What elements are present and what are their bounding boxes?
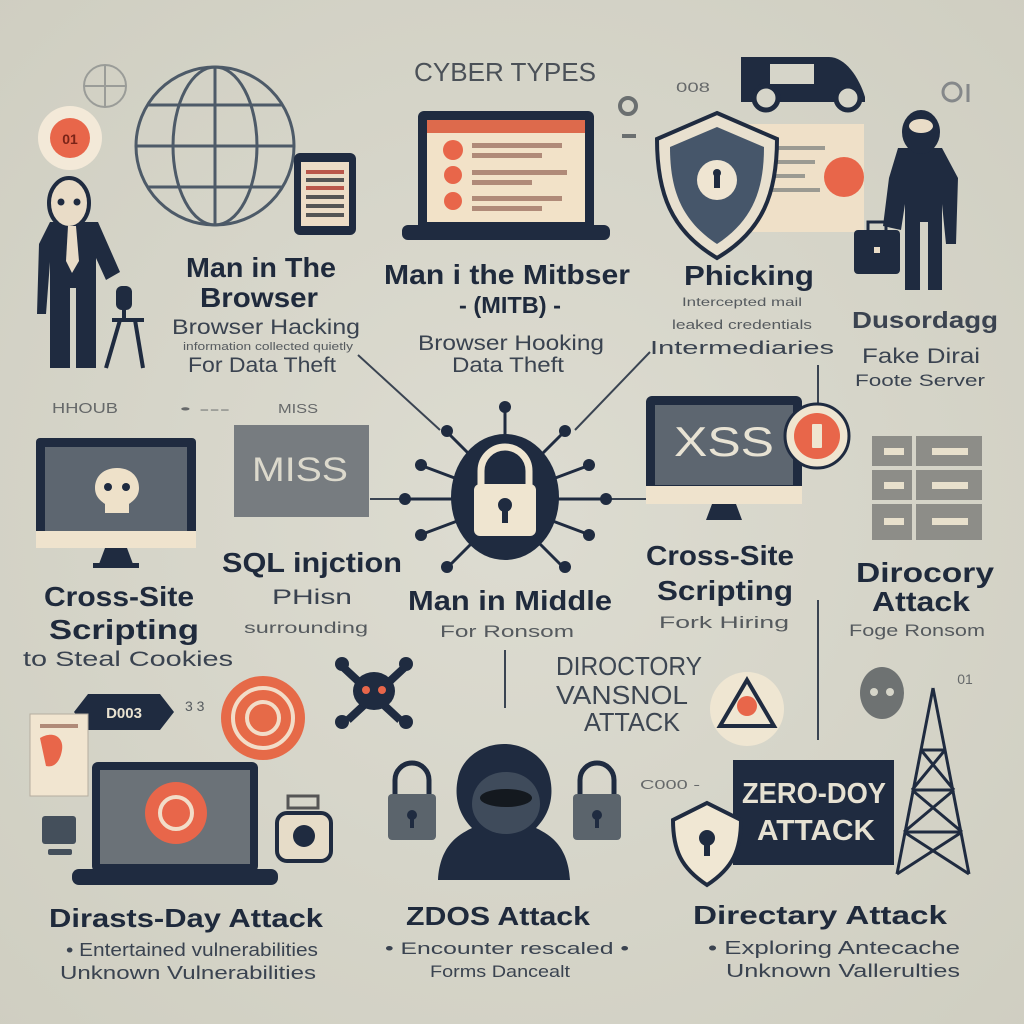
callout: D003 tag: [74, 694, 174, 730]
text block: directory attack right: Attack: [872, 586, 970, 617]
icon: document with note: [30, 714, 88, 796]
text block: dumpster: Foote Server: [855, 371, 985, 390]
text block: directory vansnol attack: VANSNOL: [556, 680, 688, 710]
text block: cross-site scripting right: Fork Hiring: [659, 613, 789, 632]
title: CYBER TYPES: [414, 57, 596, 87]
icon: padlock right: [573, 763, 621, 840]
small numbers near tag: 3 3: [185, 698, 205, 714]
icon: monitor XSS: [646, 396, 802, 520]
small text mid right: C000 -: [640, 777, 700, 792]
text block: zdos attack: • Encounter rescaled •: [385, 939, 629, 958]
icon: small lock device: [277, 796, 331, 861]
icon: small devices left of laptop: [42, 816, 76, 855]
icon: monitor with skull: [36, 438, 196, 568]
icon: laptop with spiral: [72, 762, 278, 885]
panel: MSS card: MISS: [252, 451, 348, 489]
text block: directory attack right: [849, 557, 994, 640]
small text row left: HHOUB: [52, 400, 118, 417]
small label top right of tower: 01: [957, 671, 973, 687]
text block: disaster-day attack: Dirasts-Day Attack: [49, 903, 324, 933]
icon: man in suit with stool: [37, 178, 144, 368]
text block: phishing: Intercepted mail: [682, 295, 802, 309]
panel: zero-day attack banner: ZERO-DOY: [742, 778, 886, 810]
text block: dumpster: [852, 307, 998, 390]
text block: directory attack bottom: Unknown Vallerulties: [726, 961, 960, 981]
small label top centre right: 008: [676, 79, 710, 95]
text block: cross-site scripting left: to Steal Cookies: [23, 648, 233, 671]
text block: directory attack right: Dirocory: [856, 557, 994, 588]
icon: tablet with report: [294, 153, 356, 235]
panel: zero-day attack banner: ATTACK: [757, 815, 875, 847]
icon: skull and crossbones: [335, 657, 413, 729]
icon: large globe: [136, 67, 294, 225]
icon: padlock left: [388, 763, 436, 840]
text block: man in the mitb: - (MITB) -: [459, 292, 561, 318]
icon: shield with lock: [657, 113, 777, 258]
text block: dumpster: Fake Dirai: [862, 345, 980, 368]
text block: disaster-day attack: • Entertained vulnerabilities: [66, 940, 318, 960]
text block: cross-site scripting right: [646, 540, 794, 632]
panel: phishing document: [700, 124, 864, 232]
text block: directory attack bottom: [693, 900, 960, 981]
icon: monitor XSS: XSS: [674, 418, 774, 465]
text block: directory attack right: Foge Ronsom: [849, 621, 985, 640]
icon: shield with keyhole: [673, 803, 741, 885]
panel: zero-day attack banner: [733, 760, 894, 865]
text block: sql injection: SQL injction: [222, 547, 402, 578]
icon: small marks beside laptop: [620, 98, 636, 136]
text block: directory attack bottom: • Exploring Antecache: [708, 938, 960, 958]
text block: sql injection: surrounding: [244, 620, 368, 637]
small text row left: MISS: [278, 401, 318, 416]
callout: D003 tag: D003: [106, 705, 142, 722]
icon: small marks top right: [943, 83, 968, 102]
text block: man in the mitb: Browser Hooking: [418, 332, 604, 355]
text block: cross-site scripting right: Cross-Site: [646, 540, 794, 571]
text block: man in middle: Man in Middle: [408, 585, 612, 616]
text block: sql injection: PHisn: [272, 586, 352, 609]
icon: faint skull: [860, 667, 904, 719]
icon: radio tower: [897, 688, 969, 874]
text block: directory vansnol attack: ATTACK: [584, 707, 681, 737]
text block: man in the browser: [172, 252, 360, 377]
text block: directory vansnol attack: DIROCTORY: [556, 651, 702, 681]
text block: cross-site scripting left: Cross-Site: [44, 581, 194, 612]
text block: man in the mitb: Data Theft: [452, 354, 564, 377]
text block: zdos attack: ZDOS Attack: [406, 901, 591, 931]
text block: cross-site scripting left: [23, 581, 233, 671]
icon: spiral target: [221, 676, 305, 760]
text block: man in middle: For Ronsom: [440, 622, 574, 641]
text block: man in the browser: Browser: [200, 282, 318, 313]
icon: target badge top left: 01: [62, 131, 78, 147]
text block: sql injection: [222, 547, 402, 637]
text block: man in middle: [408, 585, 612, 641]
text block: man in the browser: information collected quietly: [183, 341, 354, 353]
text block: man in the browser: Browser Hacking: [172, 316, 360, 339]
text block: phishing: Intermediaries: [650, 338, 834, 358]
icon: alert badge: [785, 404, 849, 468]
text block: man in the mitb: [384, 259, 630, 377]
text block: zdos attack: Forms Dancealt: [430, 962, 570, 981]
text block: disaster-day attack: [49, 903, 324, 983]
text block: zdos attack: [385, 901, 629, 981]
text block: directory vansnol attack: [556, 651, 702, 737]
text block: cross-site scripting right: Scripting: [657, 575, 793, 606]
small text row left: [52, 400, 318, 417]
text block: dumpster: Dusordagg: [852, 307, 998, 333]
icon: faint globe top left: [84, 65, 126, 107]
icon: hooded hacker: [438, 744, 570, 880]
connector lines: [358, 352, 818, 740]
text block: disaster-day attack: Unknown Vulnerabilities: [60, 963, 316, 983]
panel: server grid: [872, 436, 982, 540]
text block: man in the browser: Man in The: [186, 252, 336, 283]
text block: phishing: [650, 260, 834, 358]
icon: target badge top left: [38, 106, 102, 170]
text block: cross-site scripting left: Scripting: [49, 614, 199, 645]
text block: phishing: Phicking: [684, 260, 814, 291]
text block: phishing: leaked credentials: [672, 317, 813, 332]
text block: man in the mitb: Man i the Mitbser: [384, 259, 630, 290]
panel: MSS card: [234, 425, 369, 517]
small text row left: • ---: [180, 402, 230, 416]
icon: laptop with dashboard: [402, 111, 610, 240]
icon: warning badge: [710, 672, 784, 746]
text block: man in the browser: For Data Theft: [188, 354, 336, 377]
central virus lock icon: [399, 401, 612, 573]
text block: directory attack bottom: Directary Attack: [693, 900, 948, 930]
icon: van: [741, 57, 865, 110]
icon: hooded figure with briefcase: [854, 110, 958, 290]
